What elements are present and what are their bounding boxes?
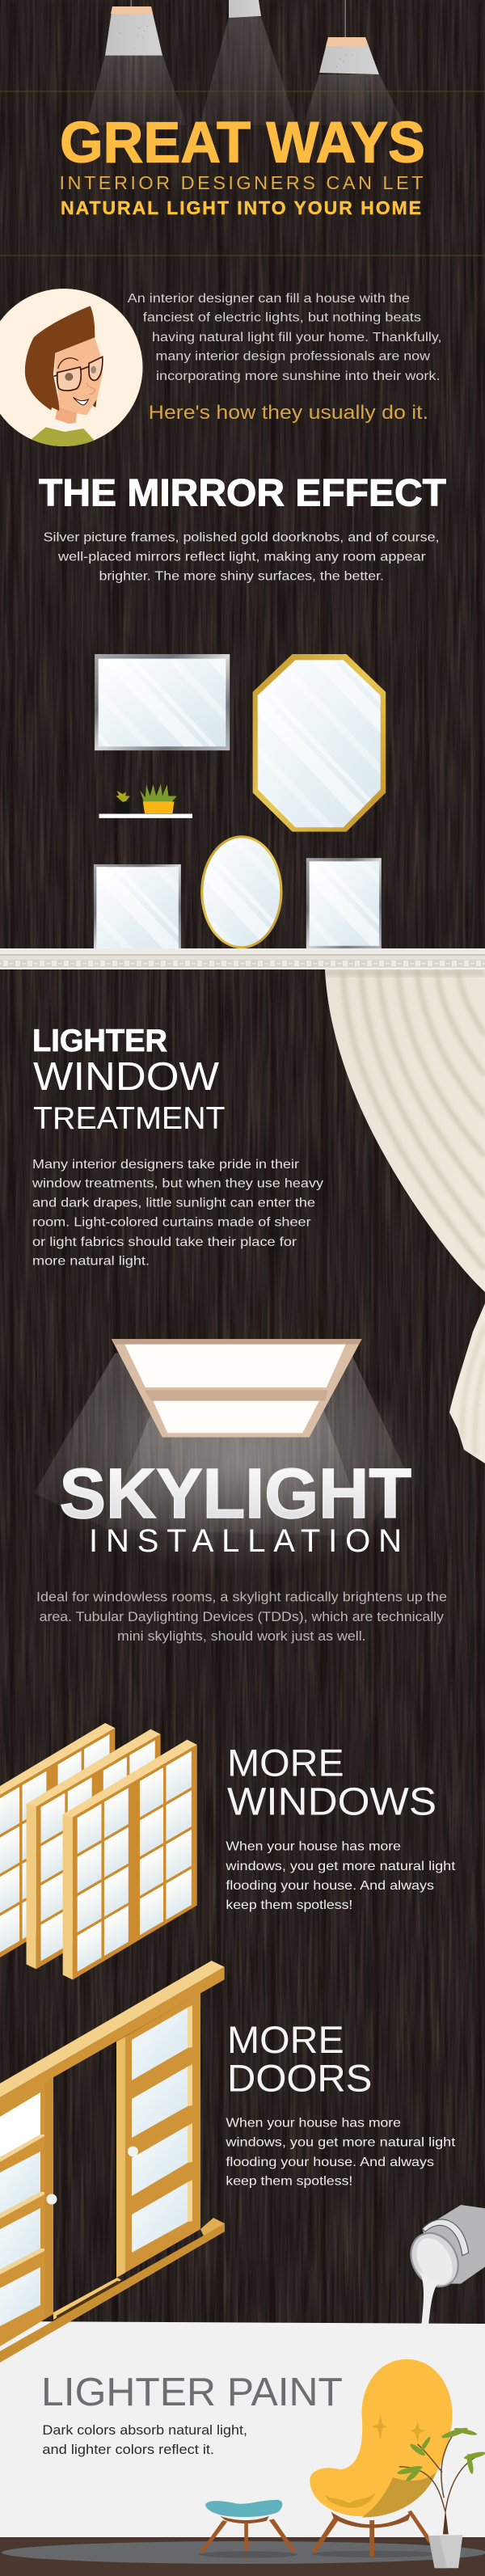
text: more windows: [225, 1840, 456, 1912]
heading: more doors: MORE: [227, 2019, 344, 2062]
sweater: [32, 427, 94, 446]
intro text: fanciest of electric lights, but nothing beats: [143, 310, 421, 325]
heading: lighter paint: LIGHTER PAINT: [41, 2371, 343, 2414]
text: lighter paint: Dark colors absorb natural light,: [42, 2423, 247, 2438]
intro text: An interior designer can fill a house with the: [128, 292, 410, 306]
hanging lamps: [86, 0, 405, 125]
text: the mirror effect: Silver picture frames, polished gold doorknobs, and of course,: [44, 530, 439, 544]
intro text: many interior design professionals are now: [155, 350, 431, 364]
paint can: [403, 2205, 485, 2293]
hair: [25, 306, 95, 411]
lower pane: [153, 1401, 319, 1433]
door sill: [0, 2218, 225, 2363]
text: more windows: windows, you get more natural light: [225, 1860, 456, 1873]
mirror: silver portrait: [306, 858, 382, 948]
intro text: incorporating more sunshine into their work.: [156, 370, 440, 383]
skylight word: SKYLIGHT: [60, 1455, 411, 1533]
paint stream: [418, 2267, 441, 2328]
title: [60, 112, 425, 218]
door right panel: [116, 1993, 200, 2278]
intro text: [128, 292, 441, 383]
text: more windows: keep them spotless!: [226, 1898, 352, 1912]
mouth: [74, 397, 88, 405]
paint room illustrations: [199, 2205, 485, 2568]
heading: more windows: MORE: [227, 1742, 344, 1784]
heading: more doors: [227, 2019, 372, 2101]
text: lighter window treatment: [32, 1158, 323, 1268]
window back: [0, 1723, 115, 1963]
neck: [55, 404, 77, 426]
text: more windows: When your house has more: [226, 1840, 401, 1854]
light cones: [86, 17, 405, 125]
heading: lighter window treatment: LIGHTER: [32, 1024, 167, 1058]
text: the mirror effect: well-placed mirrors reflect light, making any room appear: [57, 550, 426, 564]
heading: more windows: WINDOWS: [227, 1781, 436, 1824]
ottoman: [199, 2500, 297, 2560]
mirror: gold octagon: [253, 654, 386, 832]
text: lighter window treatment: room. Light-colored curtains made of sheer: [32, 1216, 311, 1230]
heading: the mirror effect: THE MIRROR EFFECT: [39, 471, 446, 513]
text: skylight: [36, 1590, 447, 1644]
light beams: [34, 1353, 405, 1536]
text: the mirror effect: [44, 530, 439, 584]
windows illustration: [0, 1723, 197, 1979]
top beam: [0, 1961, 225, 2108]
text: more doors: windows, you get more natural light: [225, 2136, 456, 2150]
intro callout: Here's how they usually do it.: [149, 402, 428, 424]
text: lighter window treatment: Many interior designers take pride in their: [32, 1158, 300, 1172]
glasses: [54, 357, 103, 391]
text: lighter window treatment: and dark drapes, little sunlight can enter the: [32, 1197, 315, 1210]
shelf with plants: [99, 783, 192, 818]
text: skylight: mini skylights, should work just as well.: [117, 1629, 366, 1644]
curtain lower drape: [449, 1303, 485, 1463]
text: more doors: When your house has more: [226, 2116, 401, 2130]
curtain upper drape: [323, 969, 485, 1293]
text: lighter window treatment: window treatments, but when they use heavy: [32, 1177, 323, 1191]
text: more windows: flooding your house. And always: [226, 1879, 434, 1893]
heading: lighter window treatment: [32, 1024, 226, 1136]
upper pane: [124, 1345, 346, 1387]
heading: skylight installation: [60, 1455, 411, 1559]
portrait: interior designer: [0, 289, 142, 453]
window front: [63, 1740, 197, 1979]
text: more doors: flooding your house. And always: [226, 2156, 434, 2169]
window middle: [27, 1729, 161, 1969]
nose: [86, 382, 95, 395]
crown moulding: [0, 948, 485, 969]
heading: more doors: DOORS: [227, 2058, 372, 2101]
mirror: silver landscape: [95, 654, 230, 750]
lamp right: [319, 0, 379, 74]
title band rules: [0, 91, 485, 255]
heading: lighter window treatment: TREATMENT: [33, 1101, 226, 1136]
text: lighter paint: and lighter colors reflect it.: [42, 2443, 214, 2457]
lighter paint wall: [0, 2321, 485, 2576]
heading: more windows: [227, 1742, 436, 1824]
mirror: gold oval: [200, 835, 283, 948]
face: [55, 337, 103, 415]
title line 3: NATURAL LIGHT INTO YOUR HOME: [61, 197, 421, 218]
title line 1: GREAT WAYS: [60, 112, 425, 175]
title line 2: INTERIOR DESIGNERS CAN LET: [60, 172, 424, 193]
armchair: [310, 2359, 452, 2557]
text: lighter paint: [42, 2423, 247, 2457]
potted plant: [396, 2426, 485, 2568]
mirror: silver square: [94, 864, 181, 949]
text: the mirror effect: brighter. The more shiny surfaces, the better.: [99, 569, 384, 584]
lamp centre: [229, 0, 261, 18]
collar: [51, 419, 77, 431]
text: skylight: Ideal for windowless rooms, a skylight radically brightens up the: [36, 1590, 447, 1605]
door knobs: [47, 2146, 138, 2204]
skylight frame: [112, 1339, 362, 1438]
sliding doors illustration: [0, 1961, 225, 2363]
text: more doors: [225, 2116, 456, 2189]
intro text: having natural light fill your home. Thankfully,: [152, 331, 441, 344]
text: lighter window treatment: or light fabrics should take their place for: [32, 1235, 297, 1249]
text: more doors: keep them spotless!: [226, 2175, 352, 2189]
glow: [49, 1358, 433, 1574]
curtain: [323, 969, 485, 1467]
door left panel: [0, 2075, 53, 2346]
text: lighter window treatment: more natural light.: [32, 1255, 150, 1268]
lamp left: [105, 0, 162, 56]
skylight: [34, 1339, 433, 1574]
heading: lighter window treatment: WINDOW: [33, 1055, 220, 1099]
mirrors gallery: [94, 654, 386, 949]
installation word: INSTALLATION: [89, 1523, 402, 1559]
text: skylight: area. Tubular Daylighting Devices (TDDs), which are technically: [40, 1610, 445, 1624]
brow and eyes: [58, 358, 78, 369]
